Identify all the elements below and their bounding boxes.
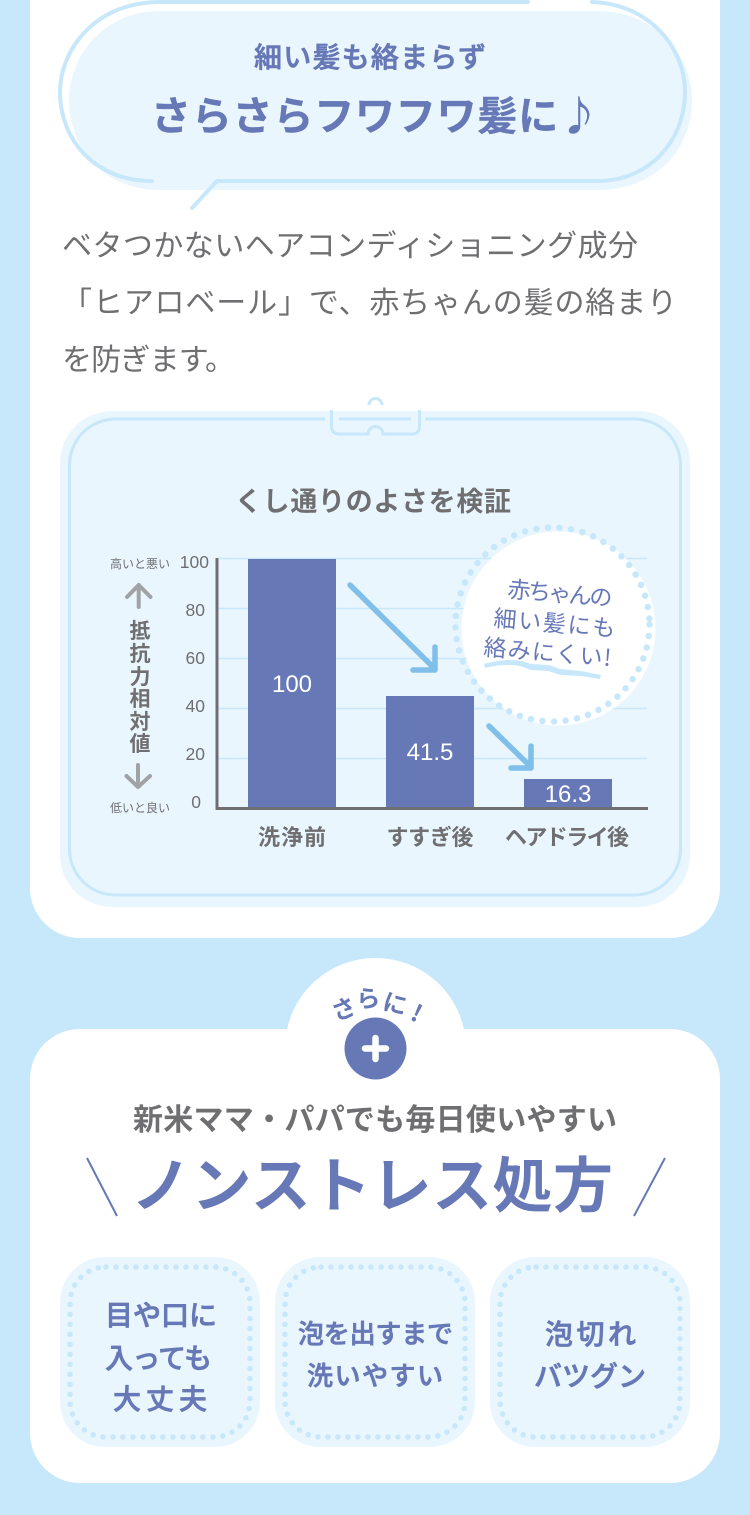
y axis title [110, 555, 170, 816]
body text [62, 221, 677, 379]
box 2 text [298, 1314, 453, 1393]
x axis labels: すすぎ後 [386, 820, 474, 852]
panel: upper white card [30, 0, 720, 938]
bar value labels: 16.3 [545, 781, 591, 808]
vertical label: 対 [130, 706, 150, 736]
y axis title: 高いと悪い [110, 555, 170, 572]
vertical label: 相 [130, 683, 150, 713]
section subheading: 新米ママ・パパでも毎日使いやすい [133, 1095, 617, 1139]
curved label: ら [355, 978, 382, 1015]
y axis tick labels: 20 [186, 744, 205, 764]
callout text: 細い髪にも [492, 599, 617, 644]
arrow: second decrease [489, 726, 531, 768]
x axis labels: ヘアドライ後 [505, 820, 629, 852]
icon: up arrow [127, 585, 150, 607]
badge: さらに! [325, 978, 429, 1080]
curved label: ! [406, 994, 429, 1029]
feature box 3 [490, 1257, 690, 1447]
y axis title: 低いと良い [110, 799, 170, 816]
y axis tick labels: 0 [191, 792, 201, 812]
heading small line: 細い髪も絡まらず [254, 36, 486, 76]
y axis tick labels: 40 [186, 696, 205, 716]
panel: lower white card [30, 958, 720, 1483]
curved label: さ [325, 987, 361, 1028]
x axis labels: 洗浄前 [258, 820, 326, 852]
y axis tick labels: 80 [186, 600, 205, 620]
bar value labels [272, 671, 591, 808]
curved label [325, 978, 429, 1029]
section heading: ノンストレス処方 [131, 1138, 613, 1225]
box 1 text: 大丈夫 [113, 1378, 207, 1418]
vertical label: 値 [130, 728, 150, 758]
icon: down arrow [126, 765, 150, 787]
body text: を防ぎます。 [62, 335, 235, 379]
y axis tick labels: 100 [180, 552, 209, 572]
icon: clip [325, 398, 425, 437]
callout text [482, 570, 617, 673]
body text: ベタつかないヘアコンディショニング成分 [62, 221, 638, 265]
feature box 1 [60, 1257, 260, 1447]
panel: chart card [60, 398, 690, 907]
bar chart [180, 552, 648, 852]
callout text: 赤ちゃんの [506, 570, 614, 613]
box 1 text: 入っても [105, 1337, 212, 1377]
heading speech bubble [60, 2, 692, 208]
vertical label [130, 615, 150, 758]
box 3 text: 泡切れ [545, 1313, 636, 1353]
box 3 text [534, 1313, 646, 1395]
box 1 text [105, 1294, 217, 1418]
bars [248, 559, 612, 809]
chart title: くし通りのよさを検証 [235, 480, 511, 519]
box 1 text: 目や口に [105, 1294, 217, 1334]
box 2 text: 洗いやすい [307, 1356, 443, 1393]
vertical label: 力 [130, 661, 150, 691]
box 3 text: バツグン [534, 1355, 646, 1395]
feature box 2 [275, 1257, 475, 1447]
vertical label: 抵 [130, 615, 150, 645]
y axis tick labels [180, 552, 209, 812]
box 2 text: 泡を出すまで [298, 1314, 453, 1351]
callout: hair note [456, 528, 656, 726]
callout text: 絡みにくい! [482, 628, 613, 673]
arrow: first decrease [350, 585, 435, 670]
y axis tick labels: 60 [186, 648, 205, 668]
bar value labels: 41.5 [407, 739, 453, 766]
curved label: に [380, 982, 411, 1022]
vertical label: 抗 [130, 638, 150, 668]
x axis labels [258, 820, 629, 852]
body text: 「ヒアロベール」で、赤ちゃんの髪の絡まり [62, 278, 677, 322]
decorative slashes beside heading [87, 1158, 665, 1216]
bar value labels: 100 [272, 671, 312, 698]
heading large line: さらさらフワフワ髪に♪ [151, 84, 599, 142]
icon: plus circle [344, 1018, 406, 1080]
